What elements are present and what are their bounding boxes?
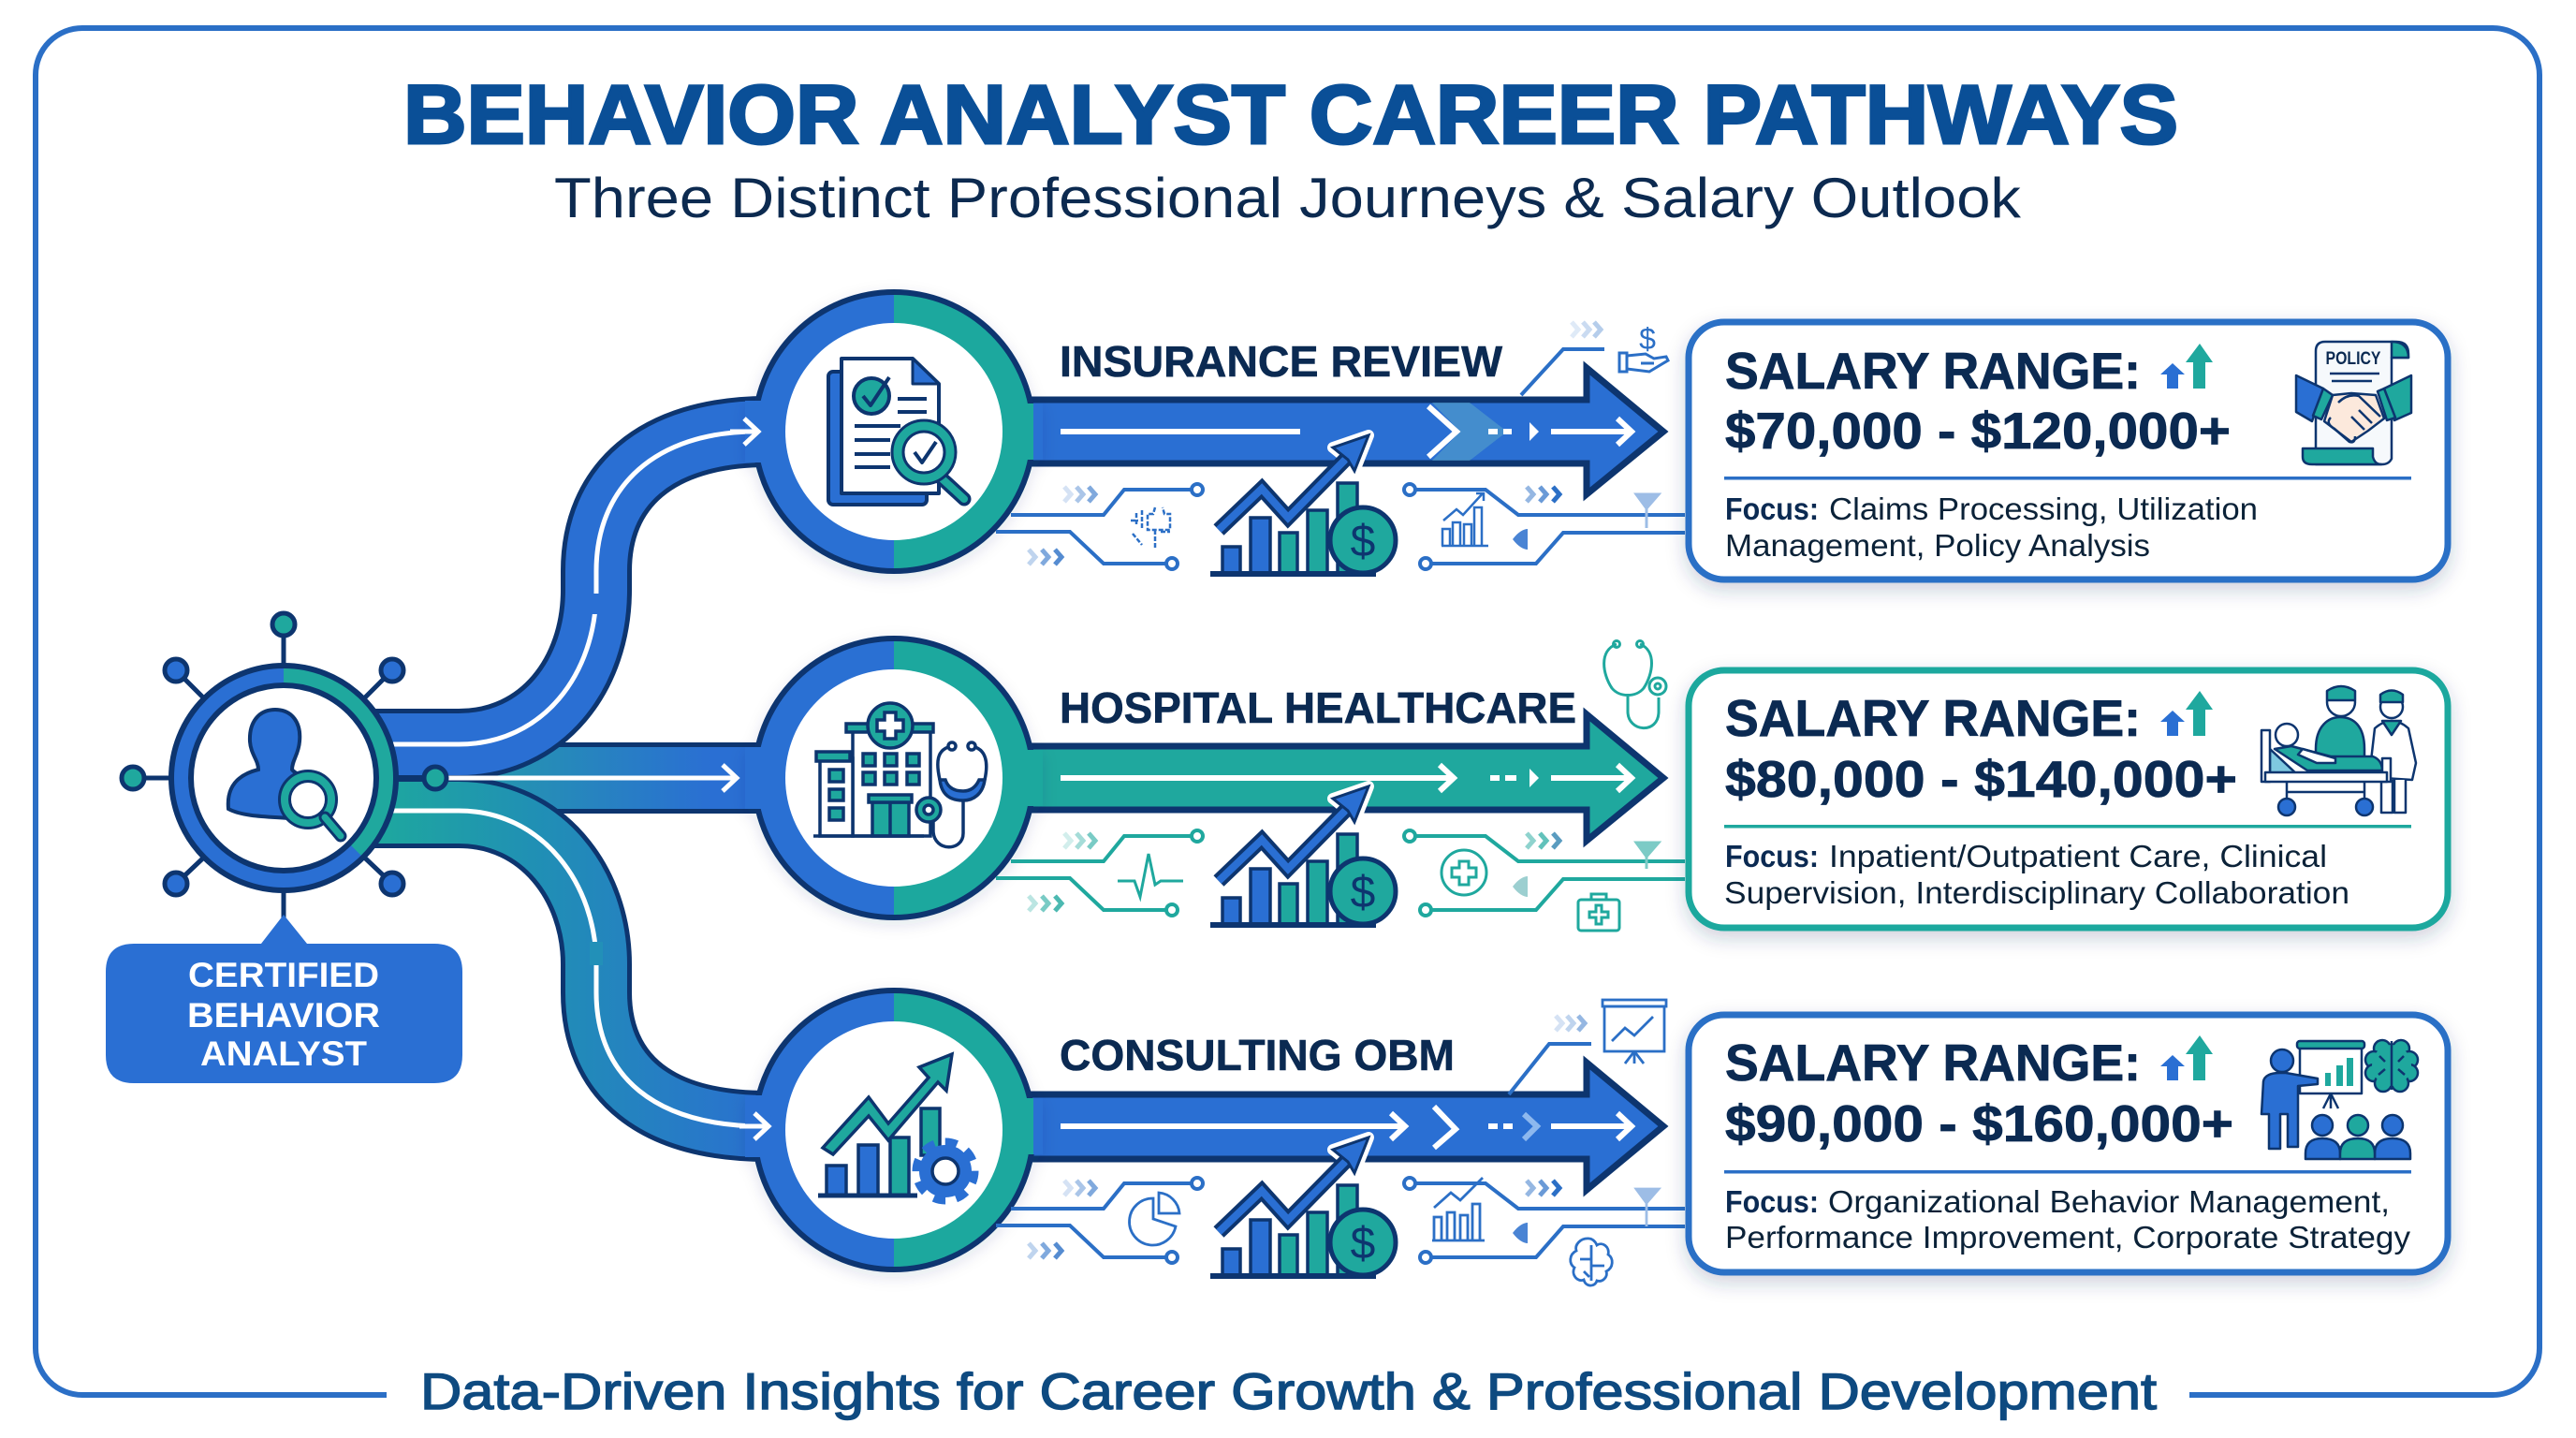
- icon: document review: [828, 359, 964, 505]
- card: insurance review salary: $70,000 - $120,000+: [1725, 402, 2231, 460]
- card: consulting obm salary: [1689, 1015, 2448, 1272]
- pathway 1: node circle: [745, 292, 1043, 571]
- pathway 2: hospital healthcare arrow: [1020, 714, 1663, 841]
- icon: presenter, brain and audience: [2261, 1040, 2418, 1159]
- icon: growth chart and gear: [818, 1054, 973, 1198]
- pathway 1: label: INSURANCE REVIEW: [1060, 337, 1503, 386]
- pathway 1: decorative small icons: $: [1639, 322, 1656, 356]
- label: certified behavior analyst: CERTIFIED: [188, 956, 379, 994]
- label: certified behavior analyst: BEHAVIOR: [187, 996, 380, 1034]
- label: certified behavior analyst: ANALYST: [200, 1034, 367, 1073]
- pathway 1: insurance review arrow: [1020, 368, 1663, 494]
- pathway 1: growth chart icon: [1210, 435, 1396, 574]
- card: consulting obm salary: Focus:: [1725, 1184, 1819, 1219]
- card: hospital healthcare salary: [1689, 670, 2448, 928]
- icon: hospital staff and patient: [2261, 686, 2416, 815]
- card: consulting obm salary: SALARY RANGE:: [1725, 1034, 2141, 1092]
- hub: certified analyst node: [122, 613, 446, 917]
- card: hospital healthcare salary: $80,000 - $140,000+: [1725, 750, 2237, 808]
- pathway 3: label: CONSULTING OBM: [1060, 1031, 1455, 1079]
- pathway 3: growth chart icon: $: [1351, 1219, 1375, 1269]
- icon: hospital and stethoscope: [813, 703, 987, 847]
- arrowhead: bottom road into node: [739, 1113, 768, 1139]
- branching road network: [370, 432, 768, 1126]
- icon: analyst with magnifier: [228, 710, 341, 836]
- card: consulting obm salary: $90,000 - $160,000+: [1725, 1094, 2233, 1152]
- arrowhead: top road into node: [730, 418, 758, 445]
- card: hospital healthcare salary: Supervision, Interdisciplinary Collaboration: [1724, 875, 2349, 910]
- card: insurance review salary: Claims Processing, Utilization: [1829, 492, 2258, 526]
- pathway 2: circuit lines: [996, 830, 1685, 916]
- icon: policy handshake: POLICY: [2325, 349, 2381, 369]
- pathway 1: circuit lines: [996, 322, 1685, 569]
- title: BEHAVIOR ANALYST CAREER PATHWAYS: [403, 67, 2178, 161]
- label: certified behavior analyst: [106, 915, 462, 1083]
- pathway 3: growth chart icon: [1210, 1137, 1396, 1276]
- card: hospital healthcare salary: SALARY RANGE:: [1725, 689, 2141, 747]
- pathway 2: growth chart icon: $: [1351, 868, 1375, 917]
- pathway 3: decorative small icons: [1130, 1000, 1666, 1285]
- card: consulting obm salary: Organizational Behavior Management,: [1828, 1184, 2390, 1219]
- icon: policy handshake: [2296, 342, 2411, 464]
- pathway 3: consulting obm arrow: [1020, 1063, 1663, 1190]
- footer tagline: Data-Driven Insights for Career Growth & Professional Development: [420, 1362, 2157, 1420]
- card: insurance review salary: SALARY RANGE:: [1725, 342, 2141, 400]
- icon: up arrows: [2160, 1035, 2213, 1080]
- subtitle: Three Distinct Professional Journeys & Salary Outlook: [554, 167, 2022, 229]
- icon: up arrows: [2160, 344, 2213, 389]
- card: hospital healthcare salary: Focus:: [1725, 839, 1819, 873]
- pathway 3: node circle: [745, 990, 1043, 1269]
- pathway 1: growth chart icon: $: [1351, 517, 1375, 566]
- card: insurance review salary: Management, Policy Analysis: [1725, 528, 2150, 563]
- icon: up arrows: [2160, 691, 2213, 736]
- card: insurance review salary: [1689, 322, 2448, 580]
- card: insurance review salary: Focus:: [1725, 492, 1819, 526]
- pathway 2: growth chart icon: [1210, 786, 1396, 925]
- pathway 2: decorative small icons: [1118, 640, 1666, 931]
- card: hospital healthcare salary: Inpatient/Outpatient Care, Clinical: [1829, 839, 2327, 873]
- pathway 2: node circle: [745, 638, 1043, 917]
- pathway 3: circuit lines: [996, 1016, 1685, 1263]
- card: consulting obm salary: Performance Improvement, Corporate Strategy: [1725, 1220, 2411, 1255]
- pathway 2: label: HOSPITAL HEALTHCARE: [1060, 683, 1576, 732]
- pathway 1: decorative small icons: [1131, 322, 1668, 550]
